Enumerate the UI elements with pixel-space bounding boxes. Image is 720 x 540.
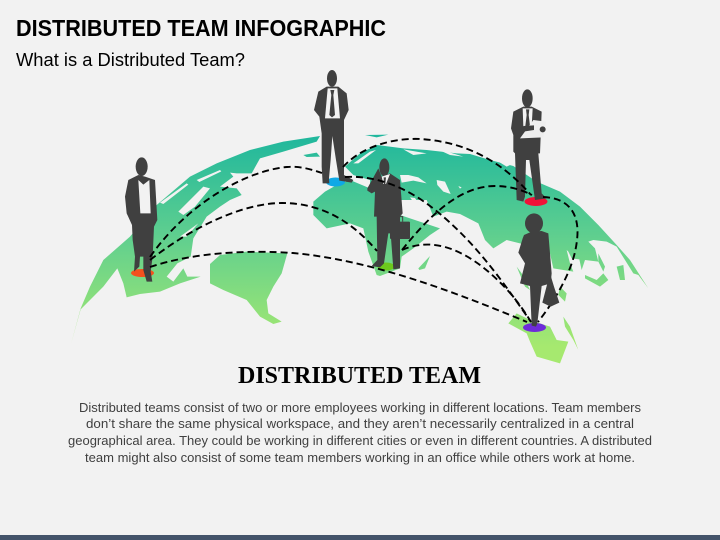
line: orange to green — [150, 203, 377, 260]
map: Canada streaks — [160, 170, 221, 237]
marker: orange — [131, 269, 154, 277]
figure: man with document — [511, 89, 547, 202]
title: DISTRIBUTED TEAM INFOGRAPHIC — [16, 15, 386, 41]
description text — [68, 400, 652, 465]
line: green to purple — [402, 245, 531, 322]
map: Americas — [71, 136, 320, 344]
description text: team might also consist of some team members working in an office while others work at home. — [85, 450, 635, 465]
description text: geographical area. They could be working in different cities or even in different countries. A distributed — [68, 433, 652, 448]
line: green to red — [402, 186, 532, 250]
connection lines — [150, 139, 578, 322]
map: inland seas and gaps — [353, 147, 510, 221]
figure: woman with jacket — [125, 157, 157, 282]
line: blue to red — [343, 139, 531, 195]
heading: Distributed Team: DISTRIBUTED TEAM — [238, 363, 481, 389]
location markers — [131, 178, 548, 332]
line: blue to purple — [345, 177, 531, 322]
subtitle: What is a Distributed Team? — [16, 50, 245, 70]
map: Eurasia, Africa and Australia — [313, 135, 648, 363]
marker: green — [378, 262, 394, 270]
line: orange to purple — [150, 252, 527, 322]
marker: blue — [326, 178, 345, 186]
line: orange to blue — [150, 167, 322, 257]
world map — [71, 135, 648, 363]
line: red to purple — [538, 197, 578, 322]
marker: purple — [523, 323, 546, 332]
figure: woman with handbag — [518, 213, 559, 327]
description text: don’t share the same physical workspace, and they aren’t necessarily centralized in a central — [86, 416, 634, 431]
footer bar — [0, 535, 720, 540]
description text: Distributed teams consist of two or more employees working in different locations. Team members — [79, 400, 641, 415]
marker: red — [524, 197, 548, 206]
figure: man on phone with briefcase — [367, 158, 410, 269]
figure: man hands in pockets — [314, 70, 353, 183]
